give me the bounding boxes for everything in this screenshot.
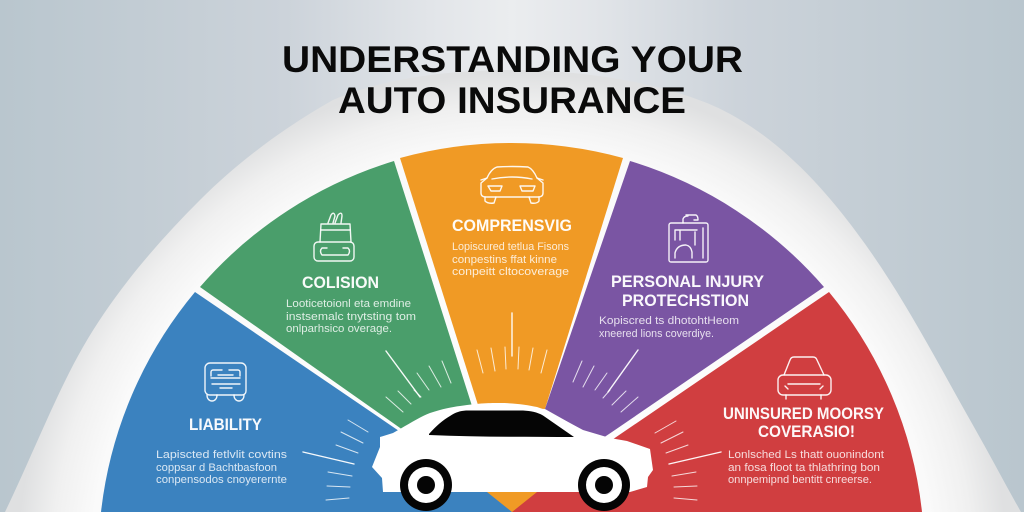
panel: comprehensive: [400, 143, 623, 409]
text: collision: onlparhsico overage.: [286, 323, 392, 335]
text: personal injury: xneered lions coverdiye.: [599, 328, 714, 340]
icon: collision: [314, 213, 354, 261]
title: AUTO INSURANCE: [338, 80, 686, 121]
panel: collision: [200, 161, 480, 435]
heading: uninsured: UNINSURED MOORSY: [723, 404, 885, 423]
icon: car: [372, 403, 653, 511]
car window: [429, 410, 574, 437]
text: uninsured: Lonlsched Ls thatt ouonindont: [728, 449, 884, 461]
text: liability: [156, 449, 288, 486]
title: [282, 39, 743, 121]
front wheel: [578, 459, 630, 511]
orange tip below car: [482, 488, 542, 512]
icon: uninsured: [778, 357, 831, 399]
text: comprehensive: Lopiscured tetlua Fisons: [452, 241, 569, 253]
text: uninsured: an fosa floot ta thlathring bon: [728, 462, 880, 474]
rear wheel: [400, 459, 452, 511]
text: personal injury: Kopiscred ts dhotohtHeom: [599, 315, 739, 327]
heading: comprehensive: COMPRENSVIG: [452, 216, 572, 235]
text: collision: Looticetoionl eta emdine: [286, 298, 411, 310]
rays: uninsured: [655, 421, 721, 500]
panel: uninsured motorist: [512, 292, 922, 512]
icon: liability: [205, 363, 246, 401]
rays: liability: [303, 420, 368, 500]
panel: liability: [101, 292, 512, 512]
panel: personal injury protection: [545, 161, 824, 440]
car body: [372, 403, 653, 492]
text: collision: instsemalc tnytsting tom: [286, 311, 416, 323]
rays: collision: [386, 351, 451, 412]
title: UNDERSTANDING YOUR: [282, 39, 743, 80]
text: liability: Lapiscted fetlvlit covtins: [156, 449, 288, 461]
text: liability: conpensodos cnoyerernte: [156, 474, 287, 486]
text: uninsured: onnpemipnd bentitt cnreerse.: [728, 474, 872, 486]
heading: liability: LIABILITY: [189, 415, 263, 434]
rays: comprehensive: [477, 313, 547, 373]
text: comprehensive: conpestins ffat kinne: [452, 254, 557, 266]
text: personal injury: [599, 315, 739, 340]
text: collision: [286, 298, 416, 335]
heading: uninsured: COVERASIO!: [758, 422, 855, 441]
heading: personal injury: [611, 272, 765, 310]
text: uninsured: [728, 449, 884, 486]
icon: comprehensive: [481, 166, 543, 203]
heading: personal injury: PROTECHSTION: [622, 291, 749, 310]
rays: personal injury: [573, 350, 638, 412]
heading: collision: COLISION: [302, 273, 379, 292]
icon: personal injury: [669, 215, 708, 262]
text: liability: coppsar d Bachtbasfoon: [156, 462, 277, 474]
heading: personal injury: PERSONAL INJURY: [611, 272, 765, 291]
heading: uninsured: [723, 404, 885, 441]
text: comprehensive: [452, 241, 569, 278]
text: comprehensive: conpeitt cltocoverage: [452, 266, 569, 278]
